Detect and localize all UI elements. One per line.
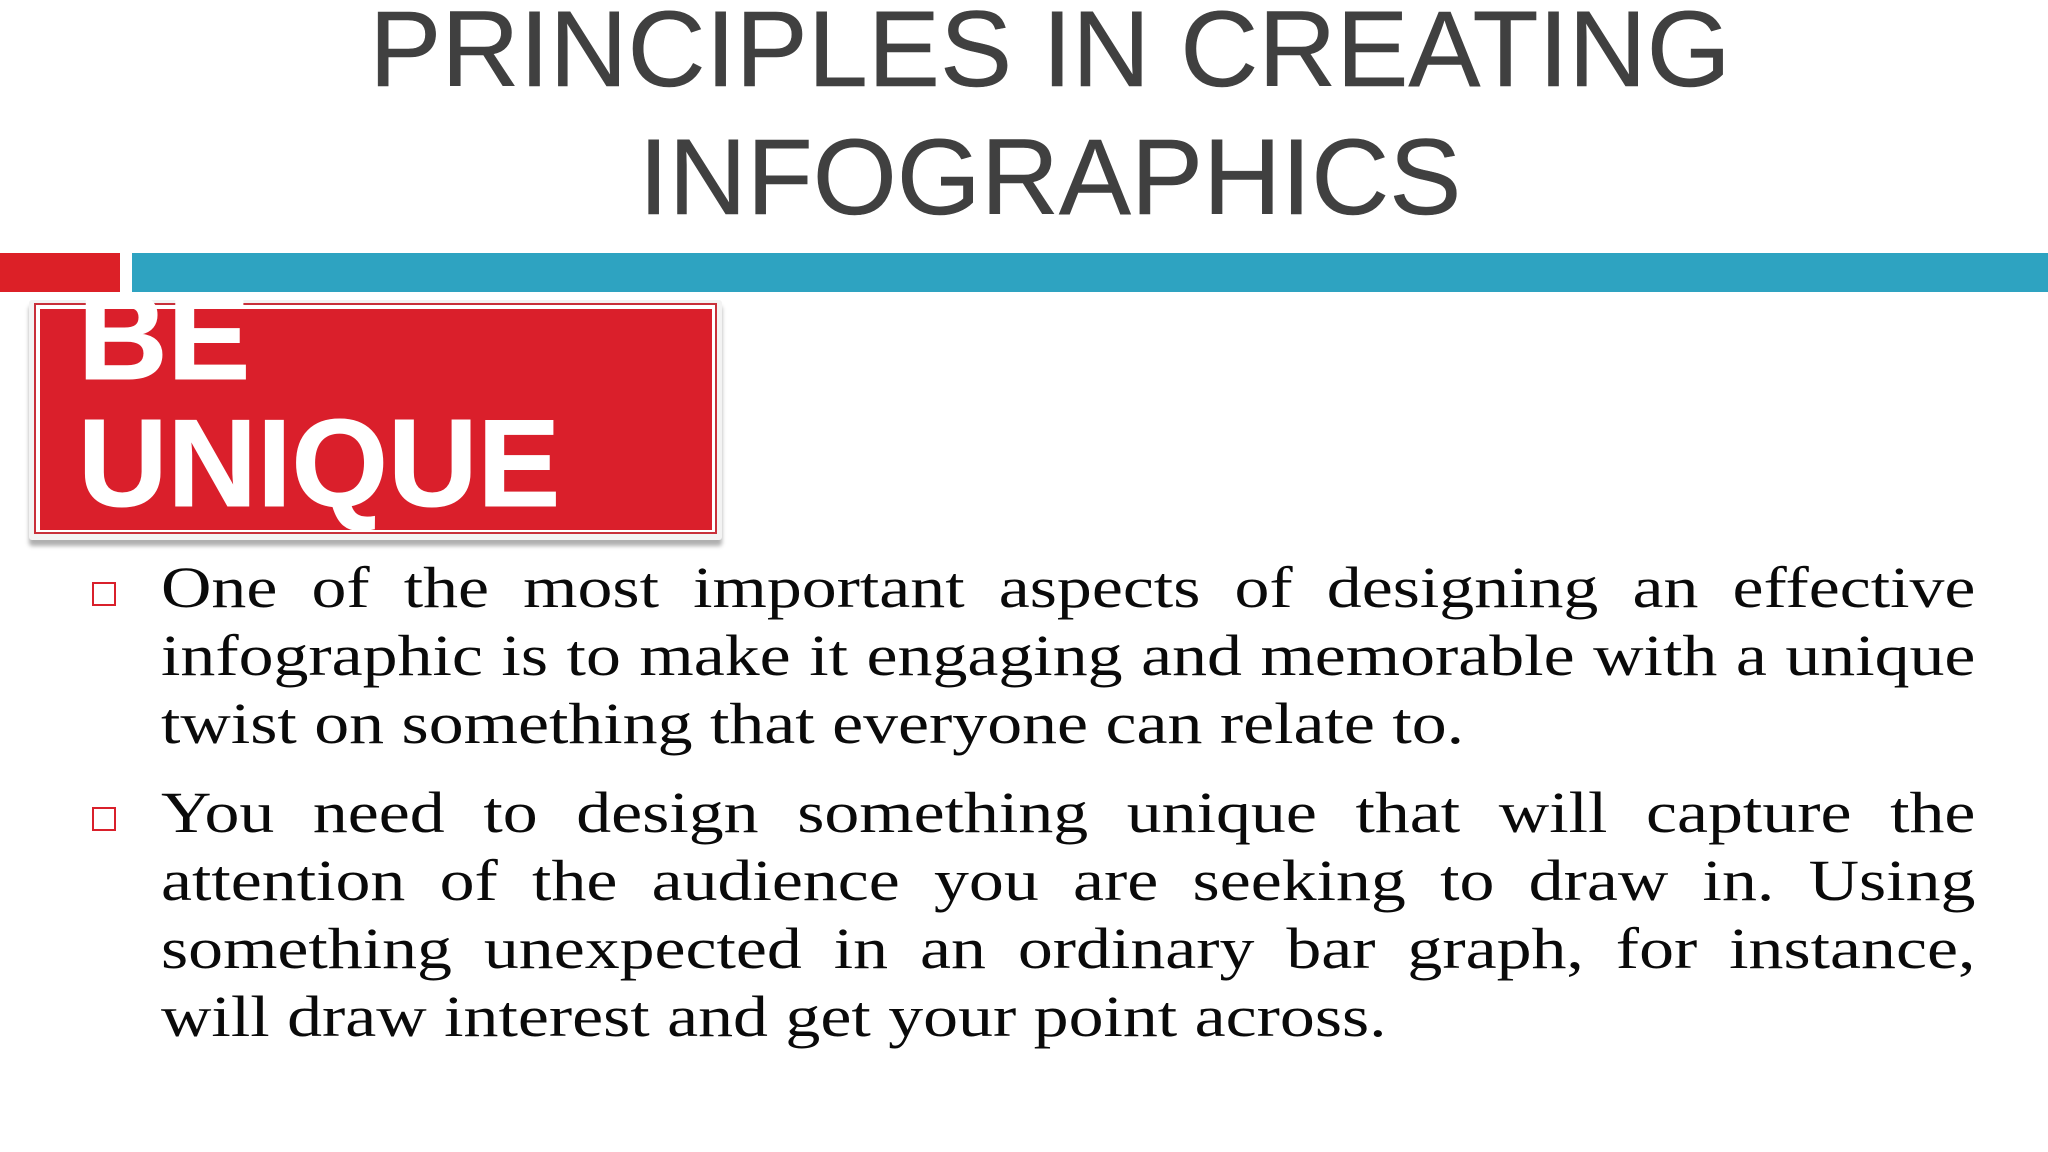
teal header bar: [132, 253, 2048, 292]
title: [369, 0, 1731, 237]
text block: second paragraph: You need to design something unique that will capture the: [161, 780, 1975, 845]
text block: second paragraph: will draw interest and get your point across.: [161, 984, 1387, 1049]
text block: second paragraph: something unexpected in an ordinary bar graph, for instance,: [161, 916, 1975, 981]
heading: be unique: UNIQUE: [78, 395, 560, 533]
title: INFOGRAPHICS: [639, 116, 1461, 237]
text block: first paragraph: infographic is to make it engaging and memorable with a unique: [161, 623, 1975, 688]
red accent bar: [0, 253, 120, 292]
heading: be unique: [78, 268, 560, 533]
bullet: first paragraph: [92, 582, 116, 606]
text block: second paragraph: [161, 780, 1975, 1049]
text block: first paragraph: [161, 555, 1975, 756]
bullet: second paragraph: [92, 807, 116, 831]
panel: be unique heading: [26, 300, 724, 548]
text block: first paragraph: One of the most important aspects of designing an effective: [161, 555, 1975, 620]
text block: first paragraph: twist on something that everyone can relate to.: [161, 691, 1464, 756]
heading: be unique: BE: [78, 268, 250, 406]
text block: second paragraph: attention of the audience you are seeking to draw in. Using: [161, 848, 1975, 913]
